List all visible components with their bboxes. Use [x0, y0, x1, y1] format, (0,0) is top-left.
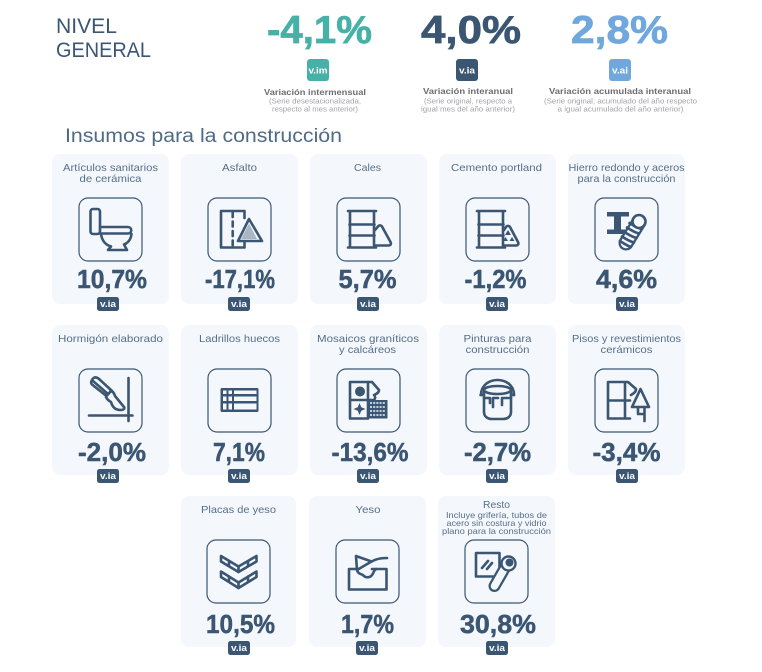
card: mosaicos — [310, 325, 427, 483]
value: 30,8% — [460, 609, 536, 639]
icon: steel beam and rods — [595, 198, 658, 261]
value: -17,1% — [205, 264, 275, 294]
card: artículos sanitarios — [52, 154, 169, 311]
card title: Mosaicos graníticos — [317, 333, 419, 345]
indicator: variación intermensual: (Serie desestacionalizada, — [269, 98, 361, 106]
badge: v.ia — [489, 643, 506, 653]
indicator: variación intermensual: respecto al mes anterior) — [272, 106, 358, 114]
indicator: variación interanual: v.ia — [459, 66, 476, 76]
badge: v.ia — [619, 471, 636, 481]
indicator: variación interanual: Variación interanual — [423, 86, 513, 96]
indicator: variación intermensual: -4,1% — [267, 9, 372, 52]
badge: v.ia — [231, 643, 248, 653]
card title — [464, 333, 532, 356]
card title: construcción — [466, 344, 530, 356]
badge — [356, 641, 378, 655]
section heading: insumos: Insumos para la construcción — [65, 126, 342, 147]
indicator: variación intermensual: v.im — [308, 66, 328, 76]
icon: sack and cement pile — [466, 198, 529, 261]
badge: v.ia — [359, 643, 376, 653]
icon: mosaic tiles — [337, 369, 400, 432]
value: -3,4% — [592, 437, 660, 467]
badge — [486, 297, 508, 311]
value: -2,7% — [464, 437, 531, 467]
card: ladrillos huecos — [181, 325, 298, 483]
card title — [442, 499, 551, 536]
card: cales — [310, 154, 427, 311]
heading: nivel general — [56, 15, 151, 62]
card: pisos — [568, 325, 685, 483]
value: 7,1% — [213, 437, 265, 467]
icon: sack and pile — [337, 198, 400, 261]
card: placas de yeso — [181, 496, 296, 655]
value: 4,6% — [596, 264, 657, 294]
icon: trowel — [79, 369, 142, 432]
value: -1,2% — [464, 264, 526, 294]
card title: para la construcción — [578, 173, 676, 185]
card title: Resto — [483, 499, 510, 511]
indicator: variación interanual — [421, 9, 521, 114]
indicator: variación interanual: (Serie original, respecto a — [424, 98, 512, 106]
badge — [357, 297, 379, 311]
card title: Cales — [354, 162, 381, 174]
icon: road and pile — [208, 198, 271, 261]
card title — [317, 333, 419, 356]
value: -13,6% — [332, 437, 408, 467]
card: cemento portland — [439, 154, 556, 311]
badge — [228, 469, 250, 483]
card: pinturas — [439, 325, 556, 483]
badge: v.ia — [360, 471, 377, 481]
indicator: variación acumulada interanual: v.ai — [612, 66, 628, 76]
card title: Hierro redondo y aceros — [568, 162, 684, 174]
badge: v.ia — [231, 471, 248, 481]
badge: v.ia — [489, 471, 506, 481]
badge — [97, 297, 119, 311]
value: -2,0% — [78, 437, 146, 467]
badge: v.ia — [100, 471, 117, 481]
card title — [63, 162, 158, 185]
indicator: variación interanual: igual mes del año anterior) — [421, 106, 515, 114]
value: 10,7% — [77, 264, 147, 294]
icon: glass and pipe — [465, 540, 528, 603]
badge — [486, 641, 508, 655]
badge: v.ia — [231, 299, 248, 309]
card title: acero sin costura y vidrio — [446, 518, 547, 528]
card title: Placas de yeso — [201, 504, 276, 516]
indicator: variación interanual: 4,0% — [421, 9, 521, 52]
card title: Cemento portland — [451, 162, 542, 174]
card title: Pisos y revestimientos — [572, 333, 681, 345]
card: yeso — [309, 496, 426, 655]
indicator: variación acumulada interanual: a igual acumulado del año anterior) — [558, 106, 684, 114]
indicator: variación intermensual: Variación intermensual — [264, 87, 366, 97]
icon: floor tile and trowel — [595, 369, 658, 432]
card title: Hormigón elaborado — [58, 333, 163, 345]
card: resto — [438, 496, 555, 655]
icon: trowel and plaster tub — [336, 540, 399, 603]
badge — [97, 469, 119, 483]
card title: de cerámica — [80, 173, 142, 185]
badge: v.ia — [619, 299, 636, 309]
badge — [357, 469, 379, 483]
card title: Ladrillos huecos — [199, 333, 280, 345]
card title: Pinturas para — [464, 333, 532, 345]
indicator: variación acumulada interanual: (Serie original, acumulado del año respecto — [544, 98, 697, 106]
badge: v.ia — [489, 299, 506, 309]
heading: nivel general: GENERAL — [56, 39, 151, 62]
card title — [572, 333, 681, 356]
indicator: variación acumulada interanual — [544, 9, 697, 114]
value: 1,7% — [341, 609, 394, 639]
indicator: variación intermensual — [264, 9, 372, 114]
card title: plano para la construcción — [442, 526, 551, 536]
badge: v.ia — [100, 299, 117, 309]
card title: Asfalto — [222, 162, 257, 174]
badge: v.ia — [360, 299, 377, 309]
badge — [228, 641, 250, 655]
badge — [486, 469, 508, 483]
card: hierro redondo — [568, 154, 685, 311]
card title: Incluye grifería, tubos de — [446, 510, 547, 520]
badge — [616, 297, 638, 311]
value: 10,5% — [206, 609, 275, 639]
icon: paint bucket — [466, 369, 529, 432]
badge — [228, 297, 250, 311]
indicator: variación acumulada interanual: Variación acumulada interanual — [549, 86, 691, 96]
heading: nivel general: NIVEL — [56, 15, 117, 38]
value: 5,7% — [338, 264, 396, 294]
indicator: variación acumulada interanual: 2,8% — [571, 9, 668, 52]
card title: Artículos sanitarios — [63, 162, 158, 174]
card title: y calcáreos — [339, 344, 396, 356]
card: asfalto — [181, 154, 298, 311]
card title: Yeso — [356, 504, 381, 516]
card title — [568, 162, 684, 185]
icon: toilet — [79, 198, 142, 261]
badge — [616, 469, 638, 483]
icon: hollow brick — [208, 369, 271, 432]
card title: cerámicos — [600, 344, 652, 356]
card: hormigón elaborado — [52, 325, 169, 483]
icon: plasterboard chevrons — [207, 540, 270, 603]
